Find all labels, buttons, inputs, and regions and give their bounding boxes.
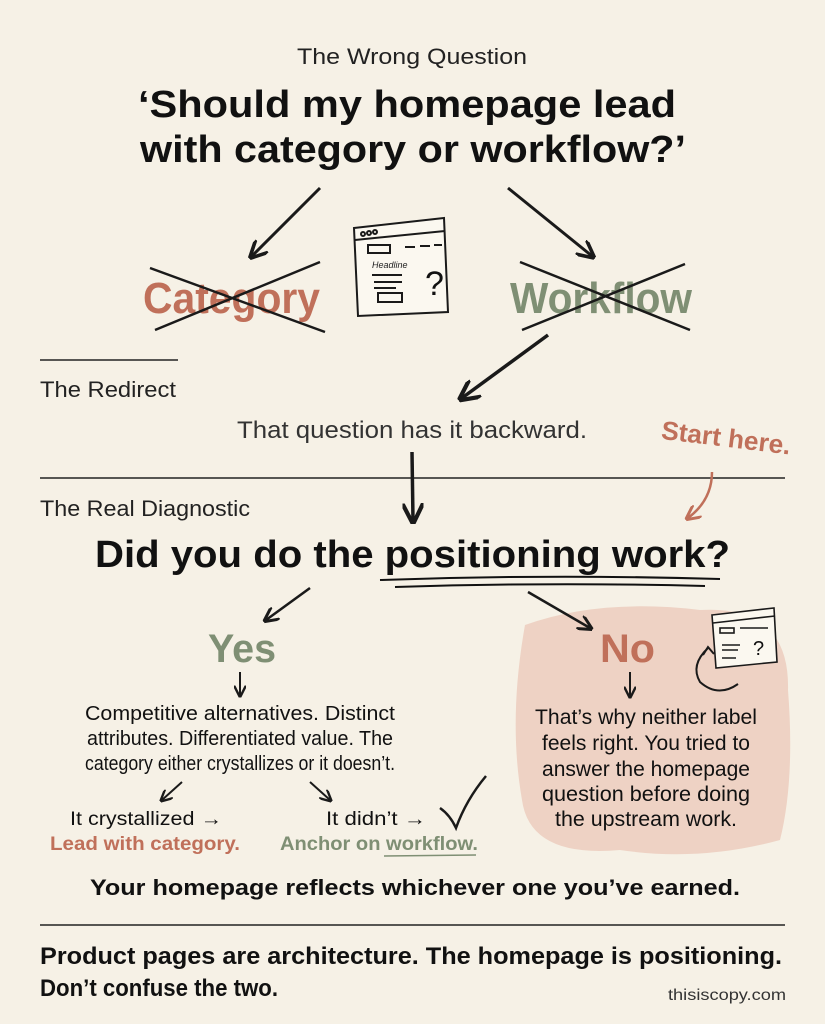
arrow: to no	[528, 592, 590, 628]
question: did you do the positioning work: Did you do the positioning work?	[95, 534, 730, 576]
icon: small browser with loop: ?	[753, 638, 764, 660]
arrow: to yes	[266, 588, 310, 620]
title: with category or workflow?’	[139, 129, 686, 171]
icon: browser with question: Headline	[372, 260, 408, 270]
text: yes explanation: attributes. Differentiated value. The	[87, 728, 393, 750]
arrows: yes branches	[162, 782, 330, 800]
arrow: down to diagnostic	[412, 452, 413, 520]
text: yes explanation	[85, 703, 395, 775]
text: yes explanation: Competitive alternatives. Distinct	[85, 703, 395, 725]
icon: browser with question	[354, 218, 448, 316]
arrow: yes down	[239, 672, 241, 695]
outcome: didn't: Anchor on workflow.	[280, 834, 478, 855]
label: category crossed out: Category	[143, 274, 320, 323]
title: ‘Should my homepage lead	[138, 84, 676, 126]
text: homepage reflects: Your homepage reflects whichever one you’ve earned.	[90, 875, 740, 900]
text: conclusion: Don’t confuse the two.	[40, 975, 278, 1002]
arrow: right to workflow	[508, 188, 592, 256]
text: conclusion: Product pages are architecture. The homepage is positioning.	[40, 943, 782, 970]
label: no: No	[600, 627, 655, 671]
panel: no blob	[516, 606, 790, 854]
text: no explanation: feels right. You tried to	[542, 732, 750, 755]
icon: check mark	[440, 776, 486, 828]
heading: the redirect: The Redirect	[40, 377, 176, 402]
text: no explanation: the upstream work.	[555, 808, 737, 831]
outcome: crystallized: Lead with category.	[50, 834, 240, 855]
outcome: didn't	[280, 809, 478, 856]
outcome: crystallized: It crystallized →	[70, 809, 222, 830]
label: workflow crossed out: Workflow	[510, 274, 693, 323]
footer: source: thisiscopy.com	[668, 987, 786, 1004]
text: yes explanation: category either crystallizes or it doesn’t.	[85, 753, 395, 775]
icon: browser with question: ?	[425, 265, 444, 303]
arrow: no down	[629, 672, 631, 696]
text: no explanation: question before doing	[542, 783, 750, 806]
text: conclusion	[40, 943, 782, 1002]
arrow: redirect	[462, 335, 548, 398]
text: no explanation: answer the homepage	[542, 758, 750, 781]
text: no explanation: That’s why neither label	[535, 706, 757, 729]
icon: small browser with loop	[696, 608, 777, 691]
text: no explanation	[535, 706, 757, 831]
label: workflow crossed out	[510, 262, 693, 330]
label: yes: Yes	[208, 627, 276, 671]
outcome: didn't: It didn’t →	[326, 809, 426, 830]
outcome: crystallized	[50, 809, 240, 855]
label: category crossed out	[143, 262, 325, 332]
callout: start here: Start here.	[660, 415, 792, 460]
callout: start here	[660, 415, 792, 518]
title	[138, 84, 686, 171]
arrow: left to category	[252, 188, 320, 256]
heading: the real diagnostic: The Real Diagnostic	[40, 496, 250, 521]
heading: the wrong question: The Wrong Question	[297, 44, 527, 69]
text: that question has it backward: That question has it backward.	[237, 417, 587, 444]
